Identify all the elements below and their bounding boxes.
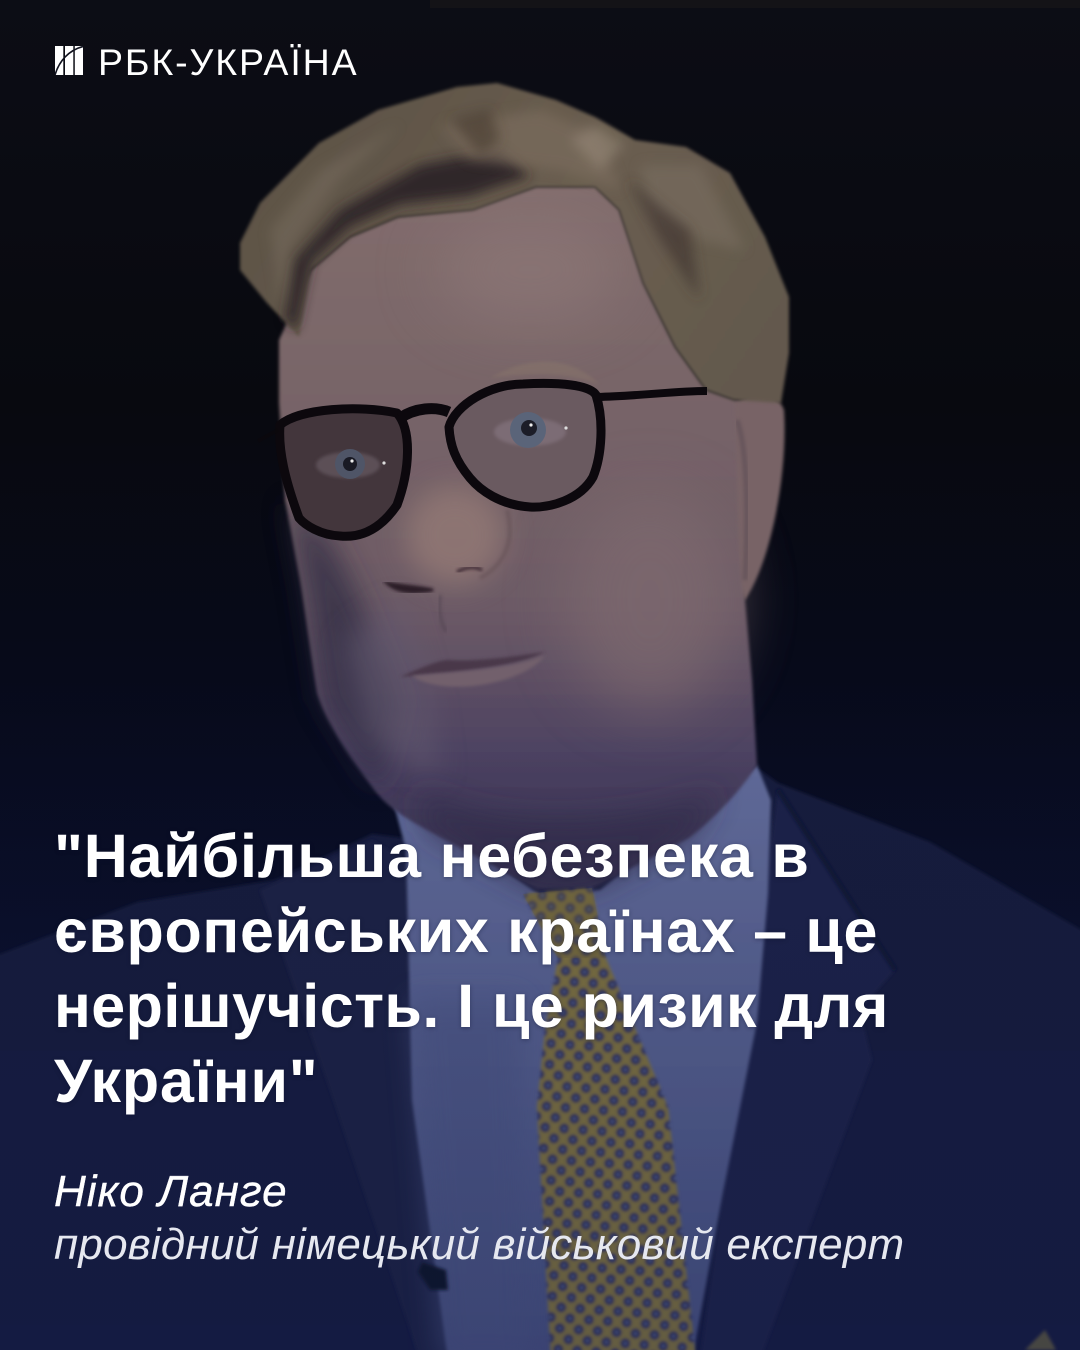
headline quote — [54, 822, 889, 1115]
headline quote: "Найбільша небезпека в — [54, 822, 810, 890]
lens left — [280, 409, 408, 536]
glasses — [258, 383, 707, 536]
face highlights — [435, 215, 625, 325]
icon: logo mark — [55, 46, 83, 75]
eyes — [316, 452, 380, 478]
nose — [387, 583, 433, 592]
byline: speaker name and role: Ніко Ланге — [54, 1167, 288, 1216]
hair — [240, 83, 789, 403]
headline quote: європейських країнах – це — [54, 897, 878, 965]
logo: RBC-Ukraine — [55, 41, 359, 83]
tie — [523, 888, 696, 1350]
eyebrow — [490, 362, 600, 385]
logo wordmark: РБК-УКРАЇНА — [98, 41, 359, 83]
neck and face — [279, 187, 757, 889]
lapel microphone — [418, 1262, 448, 1290]
headline quote: України" — [54, 1047, 319, 1115]
shirt — [390, 765, 771, 1350]
byline: speaker name and role: провідний німецький військовий експерт — [54, 1220, 904, 1269]
ear — [735, 395, 785, 600]
headline quote: нерішучість. І це ризик для — [54, 972, 889, 1040]
lens right — [449, 383, 601, 507]
byline: speaker name and role — [54, 1167, 904, 1269]
jacket — [0, 770, 1080, 1350]
mouth — [400, 652, 545, 677]
pocket square — [1025, 1330, 1056, 1350]
